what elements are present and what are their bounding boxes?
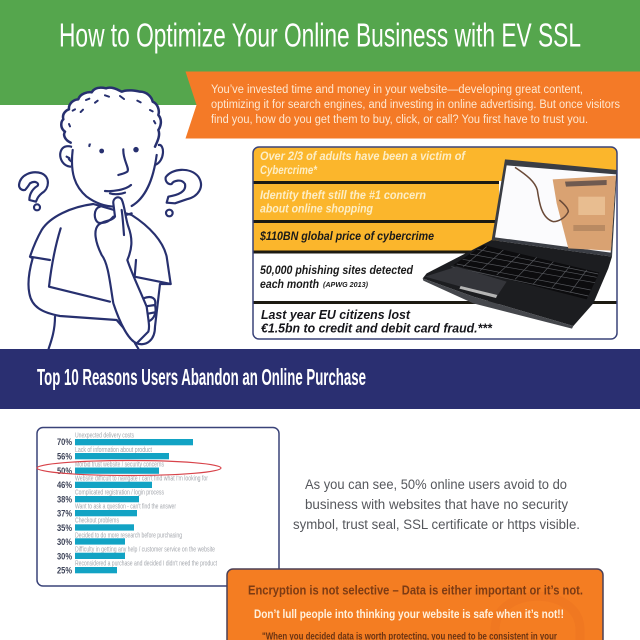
stat: identity theft: about online shopping	[260, 202, 374, 216]
bar chart: 25%	[57, 566, 72, 576]
stats panel	[253, 147, 617, 339]
stat: adults victims	[260, 149, 466, 177]
icon: head and ears	[60, 120, 163, 207]
icon: hand with raised finger	[95, 197, 149, 343]
bar chart: 35%	[57, 523, 72, 533]
stat: card fraud: €1.5bn to credit and debit card fraud.***	[261, 320, 493, 336]
bar chart: 50%	[57, 466, 72, 476]
header band	[0, 0, 640, 105]
bar chart: Unexpected delivery costs	[75, 430, 134, 440]
bar chart: Complicated registration / login process	[75, 488, 164, 496]
icon: shirt and torso	[29, 204, 171, 349]
bar chart: Want to ask a question - can't find the answer	[75, 502, 176, 510]
stat: card fraud: Last year EU citizens lost	[261, 307, 411, 322]
stat: adults victims: Cybercrime*	[260, 163, 318, 177]
bar chart: Decided to do more research before purchasing	[75, 530, 182, 540]
stat: phishing	[260, 263, 414, 291]
explanatory text: symbol, trust seal, SSL certificate or https visible.	[293, 517, 580, 532]
bar chart: 70%	[57, 437, 72, 447]
section heading: Top 10 Reasons Users Abandon an Online Purchase	[37, 364, 366, 390]
icon: fishing hook	[515, 167, 568, 222]
bar chart: Morbid trust website / security concerns	[75, 460, 164, 468]
callout: encryption	[227, 569, 603, 640]
bar chart: Lack of information about product	[75, 445, 153, 454]
explanatory text: business with websites that have no security	[305, 497, 568, 512]
intro text: You’ve invested time and money in your website—developing great content,	[211, 84, 583, 96]
bar chart: Reconsidered a purchase and decided I didn't need the product	[75, 558, 218, 568]
intro text: find you, how do you get them to buy, click, or call? You first have to trust you.	[211, 114, 588, 126]
highlight ellipse	[37, 460, 221, 476]
icon: left question mark	[19, 172, 48, 210]
callout subheading: Don’t lull people into thinking your website is safe when it’s not!!	[254, 609, 564, 621]
icon: keyboard base	[423, 240, 612, 329]
callout heading: Encryption is not selective – Data is either important or it’s not.	[248, 582, 583, 598]
intro text: optimizing it for search engines, and investing in online advertising. But once visitors	[211, 99, 620, 111]
stat: global price: $110BN global price of cybercrime	[259, 229, 434, 243]
explanatory text: As you can see, 50% online users avoid to do	[305, 477, 567, 492]
stat: identity theft	[260, 188, 426, 216]
icon: laptop lid	[492, 159, 617, 257]
intro text	[211, 84, 620, 126]
illustration: thinking man with question marks	[19, 88, 201, 349]
icon: credit card	[553, 176, 616, 251]
bar chart: 56%	[57, 452, 72, 462]
bar chart	[57, 430, 218, 576]
explanatory text	[293, 477, 580, 532]
icon: curly hair	[61, 88, 161, 147]
chart panel	[37, 428, 279, 586]
bar chart: Checkout problems	[75, 516, 119, 524]
stat: phishing: each month	[260, 277, 319, 291]
bar chart: 46%	[57, 480, 72, 490]
stat: phishing: 50,000 phishing sites detected	[260, 263, 414, 277]
bar chart: 30%	[57, 537, 72, 547]
stat: phishing: (APWG 2013)	[323, 282, 369, 289]
icon: right question mark	[166, 170, 201, 216]
laptop with credit card on hook	[423, 159, 617, 329]
stat: card fraud	[261, 307, 493, 336]
intro banner	[186, 72, 640, 138]
bar chart: Difficulty in getting any help / customer service on the website	[75, 544, 215, 554]
bar chart: Website difficult to navigate / can't find what I'm looking for	[75, 474, 208, 482]
bar chart: 30%	[57, 552, 72, 562]
bar chart: 38%	[57, 494, 72, 504]
stat: adults victims: Over 2/3 of adults have been a victim of	[260, 149, 466, 163]
section band	[0, 349, 640, 409]
bar chart: 37%	[57, 508, 72, 518]
stat: identity theft: Identity theft still the #1 concern	[260, 188, 426, 202]
